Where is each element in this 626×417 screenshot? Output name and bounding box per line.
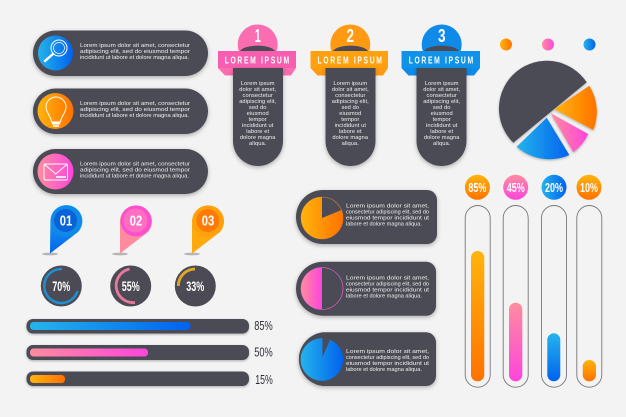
text block: tempor [249,117,267,123]
pie chart [499,61,597,159]
text block: dolore magna [424,135,460,141]
icon: magnifier [38,36,73,70]
text block [80,101,190,119]
percent bubbles: 10% [580,180,598,195]
progress bar 85%: 85% [254,318,273,333]
text block: consectetur [243,93,273,99]
percent bubbles: 85% [468,180,487,195]
text block: Lorem ipsum dolor sit amet, [346,276,430,282]
map pin 01: 01 [60,214,72,230]
icon: light bulb [38,93,74,129]
text block: incididunt ut labore et dolore magna aliqua. [80,174,189,180]
percent bubbles: 20% [545,180,563,195]
map pin 02: 02 [130,214,142,230]
panel: ribbon card 2: LOREM IPSUM [318,54,382,66]
text block: labore et [339,129,362,135]
panel: pink pie card [296,262,436,316]
text block: tempor [341,117,359,123]
progress bar 50%: 50% [254,344,273,360]
text block: aliqua. [342,141,359,147]
donut gauge 70% [41,266,82,306]
text block: Lorem ipsum [425,81,459,87]
icon: 50% pie [301,268,343,310]
panel: ribbon card 3 [402,24,480,166]
text block: eiusmod [339,111,361,117]
text block: consectetur adipiscing elit, sed do [346,210,429,216]
progress bar 85% [26,318,273,334]
text block: consectetur [335,93,365,99]
map pin 02 [112,205,152,255]
text block: labore et dolore magna aliqua. [346,294,422,300]
text block: adipiscing elit, [239,99,277,105]
text block: incididunt ut [335,123,366,129]
panel: idea pill [33,88,208,134]
text block: aliqua. [433,141,451,147]
map pin 01 [42,205,82,255]
vertical bar chart [465,206,602,387]
donut gauge 55% [110,266,151,306]
legend dots [500,38,596,50]
text block: dolore magna [240,135,276,141]
icon: 80% pie [301,197,343,239]
text block: dolore magna [332,135,369,141]
text block: Lorem ipsum dolor sit amet, [346,204,430,210]
progress bar 50% [26,344,273,360]
text block: Lorem ipsum [333,81,367,87]
map pin 03 [184,205,224,255]
panel: ribbon card 2 [310,24,388,166]
text block: eiusmod tempor incididunt ut [346,361,430,367]
text block: eiusmod [431,111,453,117]
text block: labore et [246,129,269,135]
panel: orange pie card [296,190,437,244]
donut gauge 33% [175,266,216,306]
icon: envelope [38,154,74,190]
text block: adipiscing elit, [332,99,369,105]
text block: eiusmod tempor incididunt ut [346,288,430,294]
text block: sed do [249,105,266,111]
text block [80,162,190,180]
text block: eiusmod [247,111,269,117]
text block: labore et [430,129,453,135]
text block [239,81,277,147]
text block [332,81,369,147]
text block: tempor [433,117,451,123]
text block: dolor sit amet, [332,87,369,93]
percent bubbles [465,175,602,200]
text block: consectetur adipiscing elit, sed do [346,355,429,361]
percent bubbles: 45% [507,180,525,195]
text block [346,349,430,373]
text block: incididunt ut [242,123,274,129]
text block: dolor sit amet, [239,87,276,93]
text block: adipiscing elit, sed do eiusmod tempor [80,168,190,174]
donut gauge 70%: 70% [52,279,70,294]
text block: aliqua. [249,141,267,147]
text block [80,43,190,61]
panel: ribbon card 1: 1 [255,25,261,46]
text block [423,81,461,147]
text block: consectetur [427,93,457,99]
panel: ribbon card 1: LOREM IPSUM [225,54,289,66]
progress bar 15%: 15% [255,372,273,387]
text block: Lorem ipsum dolor sit amet, consectetur [80,162,190,168]
panel: blue pie card [299,332,436,386]
panel: ribbon card 3: 3 [438,25,445,46]
text block: labore et dolore magna aliqua. [346,367,422,373]
text block: Lorem ipsum [241,81,275,87]
icon: 90% pie [301,338,343,381]
panel: mail pill [33,149,208,194]
text block: labore et dolore magna aliqua. [346,222,422,228]
text block: incididunt ut [426,123,458,129]
text block: adipiscing elit, sed do eiusmod tempor [80,49,190,55]
text block: incididunt ut labore et dolore magna aliqua. [80,113,189,119]
text block: eiusmod tempor incididunt ut [346,216,430,222]
text block: adipiscing elit, sed do eiusmod tempor [80,107,190,113]
text block: adipiscing elit, [423,99,461,105]
panel: ribbon card 3: LOREM IPSUM [409,54,473,66]
progress bar 15% [26,372,273,387]
donut gauge 55%: 55% [122,279,140,294]
text block: consectetur adipiscing elit, sed do [346,282,429,288]
map pin 03: 03 [202,214,214,230]
panel: ribbon card 2: 2 [347,25,354,46]
panel: search pill [33,30,208,76]
text block: sed do [342,105,359,111]
text block: dolor sit amet, [423,87,460,93]
text block: Lorem ipsum dolor sit amet, consectetur [80,101,190,107]
text block: sed do [433,105,450,111]
text block: Lorem ipsum dolor sit amet, consectetur [80,43,190,49]
text block: incididunt ut labore et dolore magna aliqua. [80,55,189,61]
text block [346,204,430,228]
text block [346,276,430,300]
donut gauge 33%: 33% [186,279,204,294]
text block: Lorem ipsum dolor sit amet, [346,349,430,355]
panel: ribbon card 1 [218,24,296,166]
